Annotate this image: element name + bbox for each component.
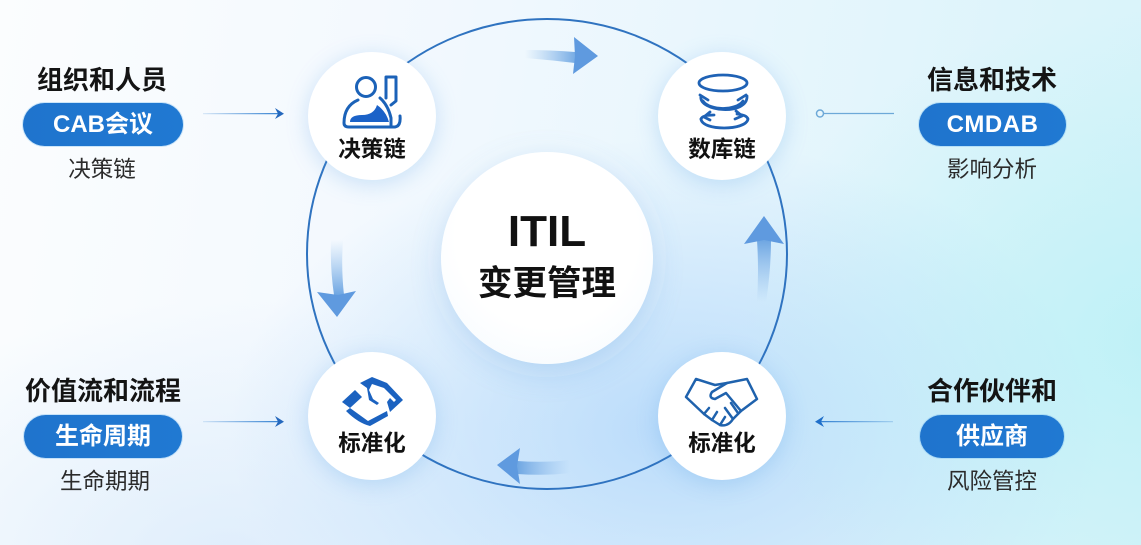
icon: person at desk <box>342 76 402 128</box>
label: 决策链 <box>338 137 406 162</box>
connector: partners <box>815 416 893 427</box>
heading: value streams and processes: 价值流和流程 <box>25 376 181 406</box>
icon: handshake <box>684 378 758 427</box>
label: 数库链 <box>688 137 756 162</box>
connector: information <box>816 110 894 117</box>
text: lifecycle: 生命期期 <box>60 469 150 494</box>
center title: ITIL <box>508 207 586 256</box>
pill: CMDAB: CMDAB <box>947 111 1038 138</box>
pill: suppliers <box>920 415 1064 458</box>
pill: lifecycle: 生命周期 <box>55 423 151 450</box>
text: impact analysis: 影响分析 <box>947 157 1037 182</box>
connector: value stream <box>203 416 284 427</box>
pill: lifecycle <box>24 415 182 458</box>
center subtitle: 变更管理 <box>478 265 616 303</box>
pill: CAB meeting <box>23 103 183 146</box>
node: database chain <box>658 52 786 180</box>
heading: partners and suppliers: 合作伙伴和 <box>927 376 1057 406</box>
label: 标准化 <box>338 431 406 456</box>
connector: organisation <box>203 108 284 119</box>
node: decision chain <box>308 52 436 180</box>
text: decision chain: 决策链 <box>68 157 136 182</box>
pill: CAB meeting: CAB会议 <box>53 111 153 138</box>
label: 标准化 <box>688 431 756 456</box>
arrow: right <box>744 216 784 302</box>
heading: organisation and people: 组织和人员 <box>37 65 167 95</box>
arrow: top <box>525 37 598 74</box>
icon: database <box>698 74 750 130</box>
icon: diamond arrows <box>342 377 403 426</box>
pill: CMDAB <box>919 103 1066 146</box>
arrow: left <box>317 240 356 317</box>
heading: information and technology: 信息和技术 <box>927 65 1057 95</box>
node: standardisation right <box>658 352 786 480</box>
arrow: bottom <box>497 448 570 484</box>
pill: suppliers: 供应商 <box>956 423 1028 450</box>
ring <box>307 19 787 489</box>
center circle <box>441 152 653 364</box>
node: standardisation left <box>308 352 436 480</box>
text: risk control: 风险管控 <box>947 469 1037 494</box>
